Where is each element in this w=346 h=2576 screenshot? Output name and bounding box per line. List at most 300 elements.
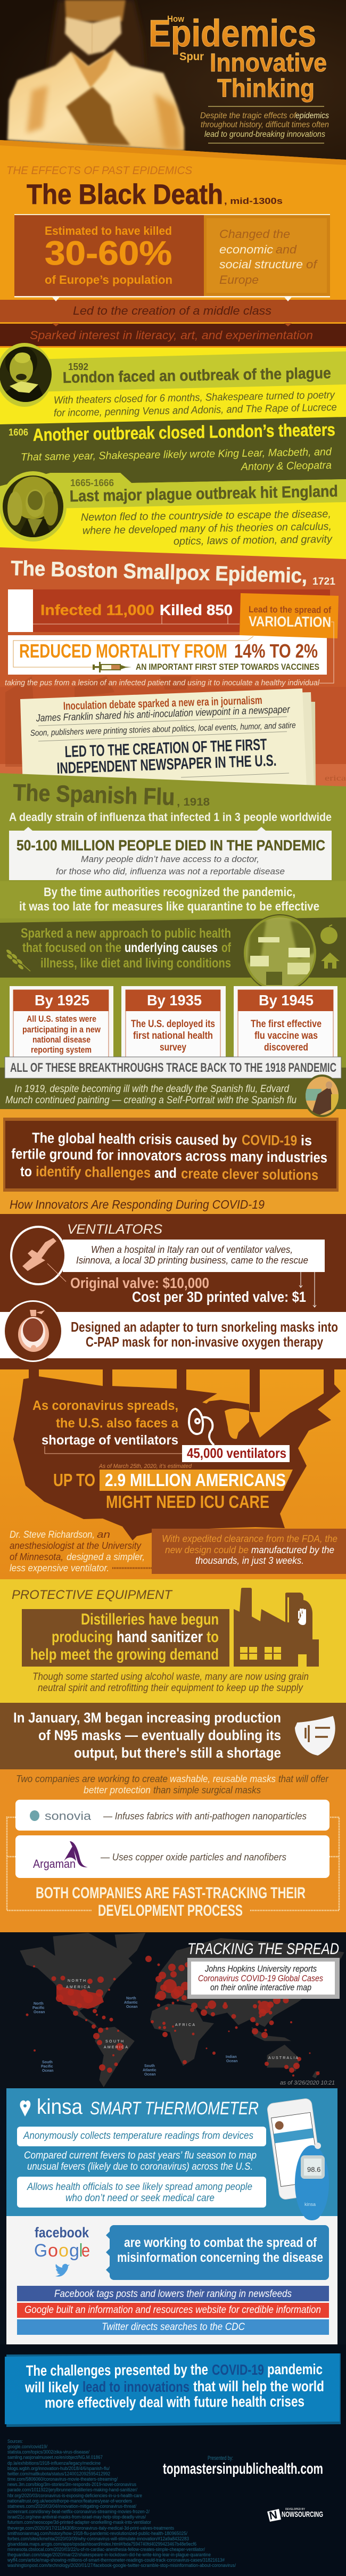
- text: sources: smithsonianmag.com/history/how-1918-flu-pandemic-revolutionized-public-health-180965025/: [7, 2531, 187, 2537]
- text: sources: washingtonpost.com/technology/2020/01/27/facebook-google-twitter-scramble-stop-misinformation-about-coronavirus/: [7, 2563, 236, 2569]
- section background: [0, 1214, 346, 1369]
- card: health officials: who don’t need or seek medical care: [65, 2193, 215, 2204]
- heading: boston: 1721: [312, 576, 335, 587]
- text: variolation definition: taking the pus from a lesion of an infected patient and using it to inoculate a healthy individual: [5, 678, 320, 687]
- credit: presented by: [163, 2455, 323, 2477]
- logo: argaman: [33, 1841, 88, 1871]
- box: distilleries: producing: [52, 1628, 113, 1646]
- orange slanted stripe: [0, 140, 346, 165]
- box: global health crisis: to: [20, 1163, 32, 1179]
- map labels: AUSTRALIA: [268, 2056, 298, 2060]
- icon: kinsa thermometer: [295, 2143, 329, 2221]
- map labels: North: [126, 1997, 136, 2000]
- map labels: Indian: [226, 2055, 237, 2059]
- section background: [0, 1369, 346, 1579]
- text box: isinnova: When a hospital in Italy ran out of ventilator valves,: [91, 1244, 293, 1255]
- text: alcohol waste: [32, 1671, 309, 1694]
- logo: kinsa: [20, 2095, 83, 2119]
- band: munch painting: In 1919, despite becoming ill with the deadly the Spanish flu, Edvard: [14, 1084, 290, 1095]
- newspaper: Soon, publishers were printing stories about politics, local events, humor, and satire: [30, 721, 296, 738]
- text: sources: wyff4.com/article/map-showing-millions-of-smart-thermometer-readings-could-track-coronavirus-cases/31821613#: [7, 2557, 225, 2563]
- band: new approach to public health: underlying causes: [125, 940, 218, 955]
- card: by 1925: [10, 986, 113, 1057]
- text: 3m production: of N95 masks — eventually doubling its: [38, 1727, 281, 1743]
- box: johns hopkins: Coronavirus COVID-19 Global Cases: [198, 1973, 323, 1983]
- band: new approach to public health: Sparked a new approach to public health: [21, 926, 231, 941]
- band: literacy and art: [0, 323, 346, 346]
- section background: [0, 1109, 346, 1214]
- panel: shakespeare and newton timeline: [0, 343, 346, 560]
- text: newton theories: Newton fled to the countryside to escape the disease,: [81, 508, 331, 523]
- box: distilleries: [22, 1609, 229, 1667]
- logo: argaman: Argaman: [33, 1857, 76, 1871]
- logo: google: g: [69, 2241, 79, 2261]
- text: sources: israel21c.org/new-antiviral-masks-from-israel-may-help-stop-deadly-virus/: [7, 2514, 146, 2520]
- heading: protective equipment: PROTECTIVE EQUIPMENT: [12, 1588, 173, 1602]
- stat box: 30-60%: [14, 215, 204, 296]
- stat box: 50-100 million: Many people didn’t have access to a doctor,: [81, 854, 259, 864]
- card: by 1935: first national health: [133, 1030, 213, 1041]
- text box: social structure: Changed the: [219, 227, 290, 241]
- card: sonovia: — Infuses fabrics with anti-pathogen nanoparticles: [103, 1811, 307, 1822]
- text: shortage of ventilators: shortage of ventilators: [42, 1433, 178, 1448]
- photo: influenza ward: [243, 915, 317, 991]
- card: by 1935: survey: [160, 1042, 186, 1053]
- text: sources: news.3m.com/blog/3m-stories/3m-responds-2019-novel-coronavirus: [7, 2482, 136, 2488]
- box: fda clearance: [152, 1529, 346, 1574]
- map columns: [29, 1369, 334, 1412]
- stat box: infected and killed: [8, 589, 330, 632]
- text: newton theories: optics, laws of motion, and gravity: [174, 534, 333, 547]
- text: fast-tracking: [36, 1884, 306, 1919]
- text: sources: nationaltrust.org.uk/woolsthorpe-manor/features/year-of-wonders: [7, 2498, 132, 2504]
- title: Innovative: [210, 49, 327, 77]
- text: compared fevers: Compared current fevers to past years’ flu season to map: [24, 2150, 257, 2161]
- card: anonymous readings: [17, 2127, 266, 2146]
- band: snorkeling adapter: [0, 1312, 346, 1358]
- panel: conclusion: [0, 2344, 346, 2576]
- icon: apple: [320, 925, 337, 944]
- heading: black death: , mid-1300s: [224, 196, 283, 206]
- 1592 heading: 1592: [68, 362, 88, 372]
- panel: ventilators: [0, 1214, 346, 1369]
- band: 1592: [32, 351, 346, 392]
- icon: newton portrait: [0, 471, 67, 542]
- logo: sonovia: [30, 1809, 92, 1823]
- heading: spanish flu: The Spanish Flu: [13, 780, 175, 810]
- icon: house: [321, 953, 340, 969]
- title: Spur: [179, 51, 204, 63]
- text box: social structure: economic: [219, 243, 273, 256]
- text: sources: [7, 2439, 236, 2569]
- text box: social structure: Europe: [219, 273, 259, 286]
- card: by 1945: By 1945: [259, 992, 314, 1008]
- map labels: NORTH: [68, 1979, 86, 1983]
- world map land: [20, 1933, 344, 2087]
- text: shakespeare poetry: for income, penning Venus and Adonis, and The Rape of Lucrece: [54, 401, 337, 419]
- text: alcohol waste: Though some started using alcohol waste, many are now using grain: [32, 1671, 309, 1683]
- map labels: Atlantic: [124, 2001, 138, 2005]
- card: by 1945: discovered: [264, 1042, 308, 1053]
- stat: original valve: Original valve: $10,000: [70, 1275, 209, 1291]
- bar: twitter: [17, 2319, 329, 2335]
- map labels: South: [144, 2064, 155, 2068]
- section background: [0, 1769, 346, 1932]
- text: alcohol waste: neutral spirit and retrofitting their equipment to keep up the supply: [38, 1683, 303, 1694]
- section background: [0, 773, 346, 1081]
- section background: [0, 547, 346, 788]
- box: global health crisis: is: [301, 1133, 312, 1148]
- card: argaman: — Uses copper oxide particles and nanofibers: [100, 1852, 286, 1863]
- text: dr richardson: of Minnesota,: [10, 1552, 63, 1562]
- stat box: 30-60%: 30-60%: [45, 235, 172, 272]
- box: distilleries: hand sanitizer: [117, 1628, 203, 1646]
- stat: 2.9 million americans: 2.9 MILLION AMERICANS: [105, 1470, 286, 1490]
- text: too late: [19, 885, 319, 913]
- logo: twitter bird: [55, 2264, 70, 2277]
- stat: 2.9 million americans: UP TO: [53, 1470, 95, 1490]
- text: 3m production: [13, 1710, 281, 1761]
- card: by 1945: flu vaccine was: [254, 1030, 318, 1041]
- box: global health crisis: and: [154, 1165, 177, 1181]
- box: challenges: pandemic: [267, 2361, 323, 2377]
- map labels: AFRICA: [175, 2023, 195, 2027]
- text: too late: it was too late for measures like quarantine to be effective: [19, 899, 319, 913]
- text: dr richardson: less expensive ventilator.: [10, 1563, 109, 1573]
- icon: kinsa thermometer: 98.6: [307, 2165, 320, 2173]
- panel: the black death: [0, 179, 346, 346]
- box: challenges: The challenges presented by the: [26, 2361, 208, 2379]
- text: shakespeare poetry: With theaters closed for 6 months, Shakespeare turned to poetry: [54, 389, 335, 406]
- logo: google: e: [81, 2241, 90, 2261]
- result box: reduced mortality: 14% TO 2%: [234, 640, 318, 662]
- icon: ventilator valve: [11, 1227, 66, 1284]
- logo: nowsourcing: NOWSOURCING: [282, 2510, 323, 2519]
- band: 1606: 1606: [9, 427, 28, 438]
- logo: google: [34, 2241, 90, 2261]
- band: 1665: 1665-1666: [70, 478, 114, 488]
- text: two companies: Two companies are working to create: [16, 1774, 168, 1784]
- box: challenges: COVID-19: [212, 2361, 264, 2378]
- text: shortage of ventilators: As coronavirus spreads,: [32, 1398, 178, 1413]
- ship silhouettes: [5, 676, 192, 767]
- card: sonovia: [15, 1800, 329, 1831]
- box: global health crisis: create clever solutions: [181, 1166, 318, 1183]
- box: fda clearance: new design could be: [165, 1545, 249, 1555]
- text: sources: samling.nasjonalmuseet.no/en/object/NG.M.01867: [7, 2455, 103, 2460]
- title: How: [167, 14, 185, 24]
- box: fda clearance: manufactured by the: [251, 1545, 334, 1555]
- map labels: North: [34, 2002, 44, 2006]
- text box: social structure: [204, 215, 330, 296]
- heading: how innovators are responding: How Innovators Are Responding During COVID-19: [10, 1197, 265, 1211]
- box: johns hopkins: [187, 1958, 340, 1999]
- panel: covid intro: [0, 1109, 346, 1214]
- card: by 1945: [234, 986, 337, 1057]
- note: date of estimate: As of March 25th, 2020, it’s estimated: [98, 1463, 192, 1470]
- icon: wheat: [5, 949, 30, 971]
- band: middle class: [0, 297, 346, 322]
- subtitle: lead to ground-breaking innovations: [204, 130, 325, 139]
- bar: google: Google built an information and resources website for credible information: [24, 2304, 321, 2316]
- band: 1606: Antony & Cleopatra: [241, 460, 332, 473]
- map labels: Pacific: [41, 2065, 53, 2069]
- result box: reduced mortality: REDUCED MORTALITY FROM: [19, 640, 227, 662]
- stat: 3d printed valve: Cost per 3D printed valve: $1: [132, 1289, 306, 1305]
- box: distilleries: help meet the growing demand: [30, 1646, 219, 1663]
- callout: variolation: [240, 593, 339, 683]
- text: two companies: washable, reusable masks: [170, 1774, 276, 1784]
- card: by 1945: The first effective: [251, 1019, 322, 1030]
- logo: nowsourcing: [267, 2508, 323, 2522]
- text: two companies: [16, 1774, 329, 1795]
- text: sources: statista.com/topics/3002/zika-virus-disease/: [7, 2449, 89, 2455]
- box: johns hopkins: Johns Hopkins University reports: [204, 1964, 317, 1974]
- icon: shakespeare portrait: [0, 343, 53, 407]
- text: sources: minnesota.cbslocal.com/2020/03/22/u-of-m-cardiac-anesthesia-fellow-creates-simple-cheaper-ventilator/: [7, 2547, 205, 2553]
- stat box: infected and killed: Killed 850: [160, 602, 233, 618]
- band: 1665: [0, 473, 346, 511]
- newspaper: Inoculation debate sparked a new era in journalism: [63, 694, 262, 712]
- card: by 1935: The U.S. deployed its: [131, 1019, 215, 1030]
- box: johns hopkins: on their online interactive map: [210, 1982, 311, 1992]
- band: new approach to public health: that focused on the: [22, 940, 121, 955]
- map labels: AMERICA: [104, 2046, 128, 2049]
- band: new approach to public health: of: [221, 940, 232, 955]
- bar: facebook: Facebook tags posts and lowers their ranking in newsfeeds: [54, 2288, 292, 2300]
- logo: nowsourcing: DEVELOPED BY: [285, 2508, 306, 2511]
- icon: snorkel mask: [3, 1300, 63, 1362]
- band: middle class: Led to the creation of a middle class: [73, 304, 271, 317]
- stat: 2.9 million americans: MIGHT NEED ICU CARE: [106, 1492, 269, 1512]
- icon: n95 mask: [295, 1717, 335, 1755]
- band: literacy and art: Sparked interest in literacy, art, and experimentation: [30, 329, 313, 342]
- panel: u.s. shortage map: [0, 1369, 346, 1579]
- panel: social media misinformation: [6, 2208, 337, 2344]
- credit: presented by: Presented by:: [208, 2455, 233, 2462]
- text: dr richardson: designed a simpler,: [67, 1552, 145, 1562]
- logo: kinsa: kinsa: [37, 2095, 83, 2119]
- text box: social structure: and: [276, 243, 297, 256]
- card: by 1925: All U.S. states were: [27, 1014, 96, 1024]
- band: munch painting: [0, 1068, 346, 1109]
- text: newton theories: [81, 508, 333, 547]
- card: anonymous readings: Anonymously collects temperature readings from devices: [23, 2130, 253, 2142]
- panel: protective equipment: [0, 1579, 346, 1703]
- text: shortage of ventilators: [32, 1398, 182, 1454]
- map labels: Atlantic: [143, 2069, 156, 2072]
- callout: variolation: Lead to the spread of: [249, 604, 331, 615]
- panel: 3m n95 masks: [0, 1703, 346, 1769]
- box: global health crisis: [3, 1118, 339, 1192]
- map labels: Pacific: [32, 2006, 45, 2010]
- icon: ventilator mask: [189, 1409, 214, 1445]
- band: 1606: That same year, Shakespeare likely wrote King Lear, Macbeth, and: [21, 446, 332, 463]
- text: sources: theverge.com/2020/3/17/21184308/coronavirus-italy-medical-3d-print-valves-treatments: [7, 2525, 174, 2531]
- result box: reduced mortality: [8, 635, 327, 675]
- bar: facebook: [17, 2286, 329, 2301]
- heading: boston: The Boston Smallpox Epidemic,: [11, 557, 308, 588]
- map labels: Ocean: [126, 2005, 137, 2009]
- box: distilleries: to: [207, 1628, 219, 1646]
- text box: social structure: of: [306, 258, 318, 271]
- text: sources: dp.la/exhibitions/1918-influenza/legacy/medicine: [7, 2460, 101, 2466]
- title: [149, 13, 327, 103]
- note: map date: as of 3/26/2020 10:21: [280, 2080, 335, 2086]
- stat box: infected and killed: Infected 11,000: [40, 602, 154, 618]
- thermometer tip overlap: [303, 2208, 320, 2220]
- subtitle: Despite the tragic effects of: [200, 111, 297, 120]
- logo: google: G: [34, 2241, 47, 2261]
- map labels: Ocean: [144, 2073, 155, 2077]
- map labels: Ocean: [34, 2011, 45, 2014]
- card: by 1925: national disease: [32, 1035, 90, 1045]
- logo: google: o: [59, 2241, 69, 2261]
- heading: ventilators: VENTILATORS: [67, 1222, 162, 1237]
- panel: boston smallpox epidemic: [0, 547, 346, 788]
- band: new approach to public health: illness, like diet and living conditions: [40, 956, 231, 971]
- text: sources: google.com/covid19/: [7, 2444, 47, 2450]
- text: shakespeare poetry: [54, 389, 337, 419]
- map: united states: [13, 1376, 341, 1540]
- text: sources: theguardian.com/stage/2020/mar/22/shakespeare-in-lockdown-did-he-write-king-lear-in-plague-quarantine: [7, 2552, 211, 2558]
- text: compared fevers: [24, 2150, 257, 2172]
- map: great lakes: [202, 1393, 249, 1439]
- icon: phone app: [267, 2098, 324, 2200]
- yellow background: [0, 348, 346, 560]
- card: health officials: Allows health officials to see likely spread among people: [27, 2181, 252, 2193]
- logo: nowsourcing: N: [268, 2509, 278, 2522]
- band: munch painting: Munch continued painting — creating a Self-Portrait with the Spanish flu: [5, 1095, 296, 1106]
- text: dr richardson: Dr. Steve Richardson,: [10, 1529, 95, 1540]
- heading: smart thermometer: SMART THERMOMETER: [90, 2098, 259, 2119]
- text: compared fevers: unusual fevers (likely due to coronavirus) across the U.S.: [27, 2161, 253, 2172]
- icon: syringe: [93, 662, 131, 672]
- card: by 1935: By 1935: [147, 992, 202, 1008]
- text box: isinnova: [63, 1240, 325, 1272]
- map labels: AMERICA: [66, 1986, 90, 1989]
- icon: kinsa thermometer: kinsa: [304, 2202, 316, 2207]
- box: global health crisis: COVID-19: [242, 1132, 297, 1148]
- map labels: Ocean: [226, 2060, 237, 2063]
- text: dr richardson: [10, 1529, 152, 1573]
- icon: distillery factory: [234, 1588, 319, 1667]
- stat box: 50-100 million: for those who did, influenza was not a reportable disease: [56, 866, 285, 876]
- card: by 1935: [121, 986, 226, 1057]
- card: health officials: [17, 2177, 266, 2208]
- result box: reduced mortality: AN IMPORTANT FIRST STEP TOWARDS VACCINES: [136, 662, 319, 672]
- map labels: Ocean: [42, 2069, 53, 2073]
- arrows: from text box: [299, 1272, 316, 1307]
- bar: twitter: Twitter directs searches to the CDC: [102, 2321, 245, 2333]
- box: challenges: [5, 2353, 341, 2427]
- newspaper: [20, 688, 316, 788]
- text: sources: time.com/5806060/coronavirus-movie-theaters-streaming/: [7, 2476, 118, 2482]
- callout: working to combat: [106, 2225, 329, 2280]
- icon: munch self-portrait: [306, 1074, 339, 1117]
- stat: 45,000 ventilators: 45,000 ventilators: [187, 1445, 286, 1461]
- icon: hand: [298, 1609, 306, 1625]
- banner: trace back to 1918: [5, 1057, 341, 1078]
- text: sources: Sources:: [7, 2439, 23, 2444]
- text: sources: futurism.com/neoscope/3d-printed-adapter-snorkelling-mask-into-ventilator: [7, 2520, 151, 2525]
- text: sources: forbes.com/sites/kmehta/2020/03/09/why-coronavirus-will-stimulate-innovation/#12a9a8432283: [7, 2536, 189, 2542]
- stat box: 50-100 million: [9, 827, 332, 880]
- text: shortage of ventilators: the U.S. also faces a: [56, 1416, 179, 1431]
- map labels: South: [42, 2061, 53, 2064]
- text: newton theories: where he developed many of his theories on calculus,: [83, 521, 332, 537]
- band: 1606: [0, 417, 346, 486]
- subtitle: throughout history, difficult times often: [201, 120, 329, 129]
- box: challenges: lead to innovations: [83, 2378, 190, 2395]
- card: argaman: [15, 1835, 329, 1878]
- text: sources: blogs.wgbh.org/innovation-hub/2018/4/6/spanish-flu/: [7, 2466, 110, 2472]
- card: by 1925: By 1925: [35, 992, 89, 1008]
- logo: google: l: [79, 2241, 83, 2261]
- box: global health crisis: The global health crisis caused by: [32, 1130, 237, 1148]
- box: fda clearance: thousands, in just 3 weeks.: [195, 1555, 304, 1566]
- text: too late: By the time authorities recognized the pandemic,: [44, 885, 295, 899]
- text: dr richardson: anesthesiologist at the University: [10, 1540, 142, 1551]
- panel: kinsa smart thermometer: [6, 2088, 337, 2216]
- text: sources: parade.com/1011922/jerylbrunner/distilleries-making-hand-sanitizer/: [7, 2487, 137, 2493]
- box: distilleries: Distilleries have begun: [81, 1611, 219, 1628]
- stat box: 30-60%: Estimated to have killed: [45, 224, 172, 237]
- text box: social structure: social structure: [219, 258, 303, 271]
- panel: spanish flu: [0, 773, 346, 1109]
- band: new approach to public health: [0, 917, 346, 978]
- panel: black death background: [0, 133, 346, 351]
- box: global health crisis: identify challenges: [36, 1163, 151, 1181]
- title: Epidemics: [149, 13, 316, 55]
- dotted frame: [7, 1817, 339, 1910]
- panel: hero header: [0, 0, 346, 165]
- text: 3m production: In January, 3M began increasing production: [13, 1710, 281, 1726]
- heading: effects of past epidemics: THE EFFECTS OF PAST EPIDEMICS: [6, 164, 193, 177]
- heading: spanish flu: , 1918: [177, 796, 210, 808]
- title: Thinking: [217, 75, 315, 103]
- text: fast-tracking: DEVELOPMENT PROCESS: [98, 1902, 243, 1919]
- logo: facebook: facebook: [35, 2225, 89, 2241]
- box: challenges: will likely: [24, 2379, 79, 2395]
- subtitle: epidemics: [295, 111, 329, 120]
- text: 3m production: output, but there's still a shortage: [74, 1745, 281, 1761]
- text: two companies: better protection: [84, 1785, 151, 1795]
- map labels: SOUTH: [105, 2040, 123, 2044]
- text: sources: hbr.org/2020/03/coronavirus-is-exposing-deficiencies-in-u-s-health-care: [7, 2493, 142, 2499]
- text: two companies: than simple surgical masks: [153, 1785, 261, 1795]
- newspaper: James Franklin shared his anti-inoculation viewpoint in a newspaper: [36, 704, 290, 724]
- heading: black death: The Black Death: [27, 179, 223, 210]
- stat box: 30-60%: of Europe’s population: [45, 273, 172, 286]
- subtitle: [200, 106, 329, 144]
- text: sources: twitter.com/mattkubota/status/1240012092595412992: [7, 2471, 110, 2477]
- stat: 2.9 million americans: [53, 1470, 293, 1512]
- covid-19 case markers: [26, 1956, 319, 2077]
- text: sources: screenrant.com/disney-beat-netflix-coronavirus-streaming-movies-frozen-2/: [7, 2509, 150, 2515]
- map labels: [32, 1979, 298, 2077]
- box: fda clearance: With expedited clearance from the FDA, the: [162, 1533, 337, 1544]
- panel: tracking the spread: [0, 1932, 346, 2088]
- photo: masked woman: [7, 0, 184, 151]
- logo: google: o: [48, 2241, 58, 2261]
- text: sources: statnews.com/2020/03/04/innovation-mitigating-coronavirus-threat/: [7, 2504, 136, 2509]
- card: by 1925: reporting system: [31, 1045, 92, 1055]
- logo: sonovia: sonovia: [45, 1809, 92, 1823]
- text: two companies: that will offer: [278, 1774, 329, 1784]
- panel: reusable masks: [0, 1769, 346, 1932]
- card: by 1925: participating in a new: [22, 1024, 101, 1035]
